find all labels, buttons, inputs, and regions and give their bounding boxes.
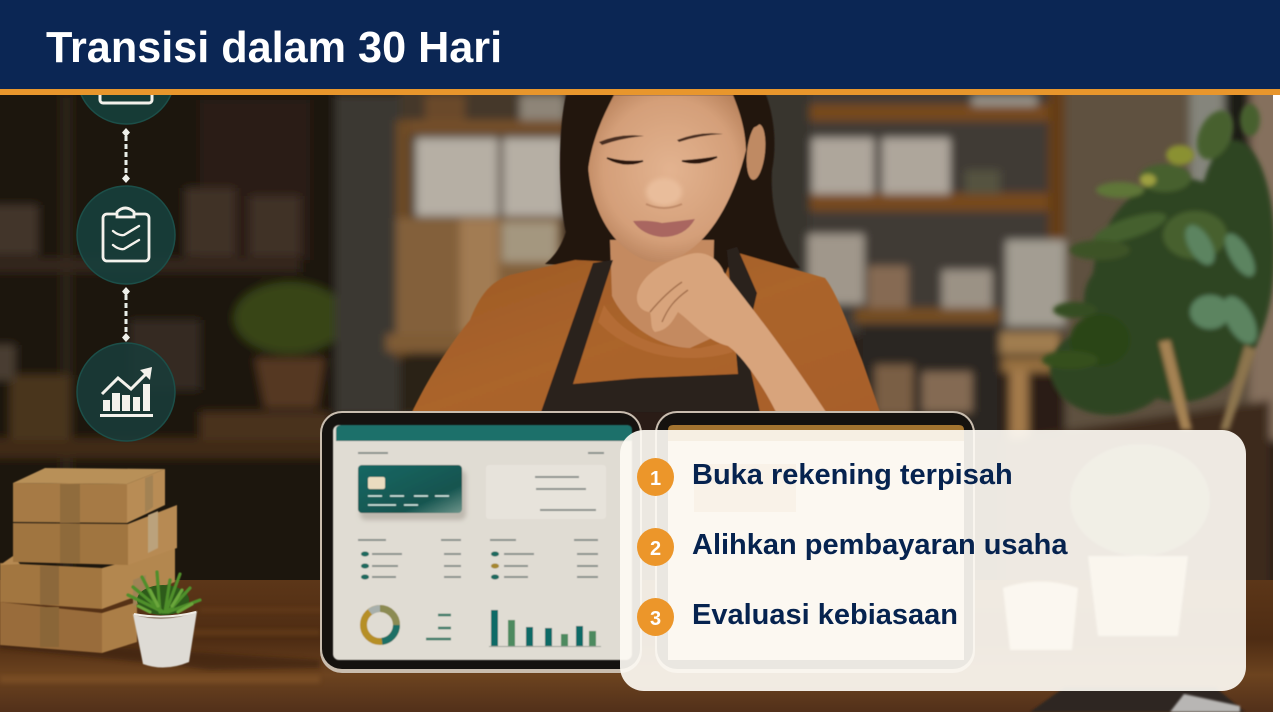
woman with chin on hand [412, 95, 880, 412]
tablet 2: behind panel [655, 411, 975, 673]
step 2 [637, 528, 1068, 566]
step 3 [637, 598, 958, 636]
tablet 1: finance dashboard [320, 411, 642, 673]
card shadow [360, 470, 466, 520]
collar [598, 305, 733, 358]
timeline circle 2: clipboard [77, 186, 175, 284]
title: Transisi dalam 30 Hari [46, 24, 502, 72]
table [0, 580, 1280, 712]
step 1 [637, 458, 1013, 496]
step 1 text: Buka rekening terpisah [692, 459, 1013, 491]
lips [633, 219, 695, 237]
bar chart [489, 610, 601, 647]
step 2 text: Alihkan pembayaran usaha [692, 529, 1068, 561]
connector 1 [122, 128, 130, 183]
nose [646, 178, 682, 206]
hair [545, 95, 800, 270]
number badge 2 [637, 528, 674, 566]
white cup and plant behind panel [1004, 556, 1188, 650]
ear [746, 124, 766, 181]
timeline circle 1: calendar [80, 95, 172, 125]
number badge 3: 3 [650, 608, 661, 630]
donut chart [364, 608, 396, 642]
number badge 1 [637, 458, 674, 496]
face [588, 95, 746, 262]
number badge 3 [637, 598, 674, 636]
connector 2 [122, 287, 130, 342]
step 3 text: Evaluasi kebiasaan [692, 599, 958, 631]
blurred shop background [0, 95, 1273, 580]
header bar [0, 0, 1280, 89]
blurred plant on the right [1042, 104, 1275, 430]
timeline circle 3: growth chart [77, 343, 175, 441]
hair strands over temple [587, 95, 614, 169]
left timeline of three icons [76, 95, 176, 442]
apron [541, 247, 760, 412]
orange header rule [0, 89, 1280, 95]
eyebrows [599, 135, 644, 145]
bank card [358, 465, 462, 513]
panel: three action steps [620, 430, 1246, 691]
number badge 1: 1 [650, 468, 661, 490]
number badge 2: 2 [650, 538, 661, 560]
eyes [607, 158, 643, 164]
stacked cardboard boxes [0, 468, 177, 653]
shirt [412, 252, 880, 412]
hand and forearm [637, 253, 826, 412]
potted plant [128, 572, 200, 668]
neck [610, 240, 714, 348]
